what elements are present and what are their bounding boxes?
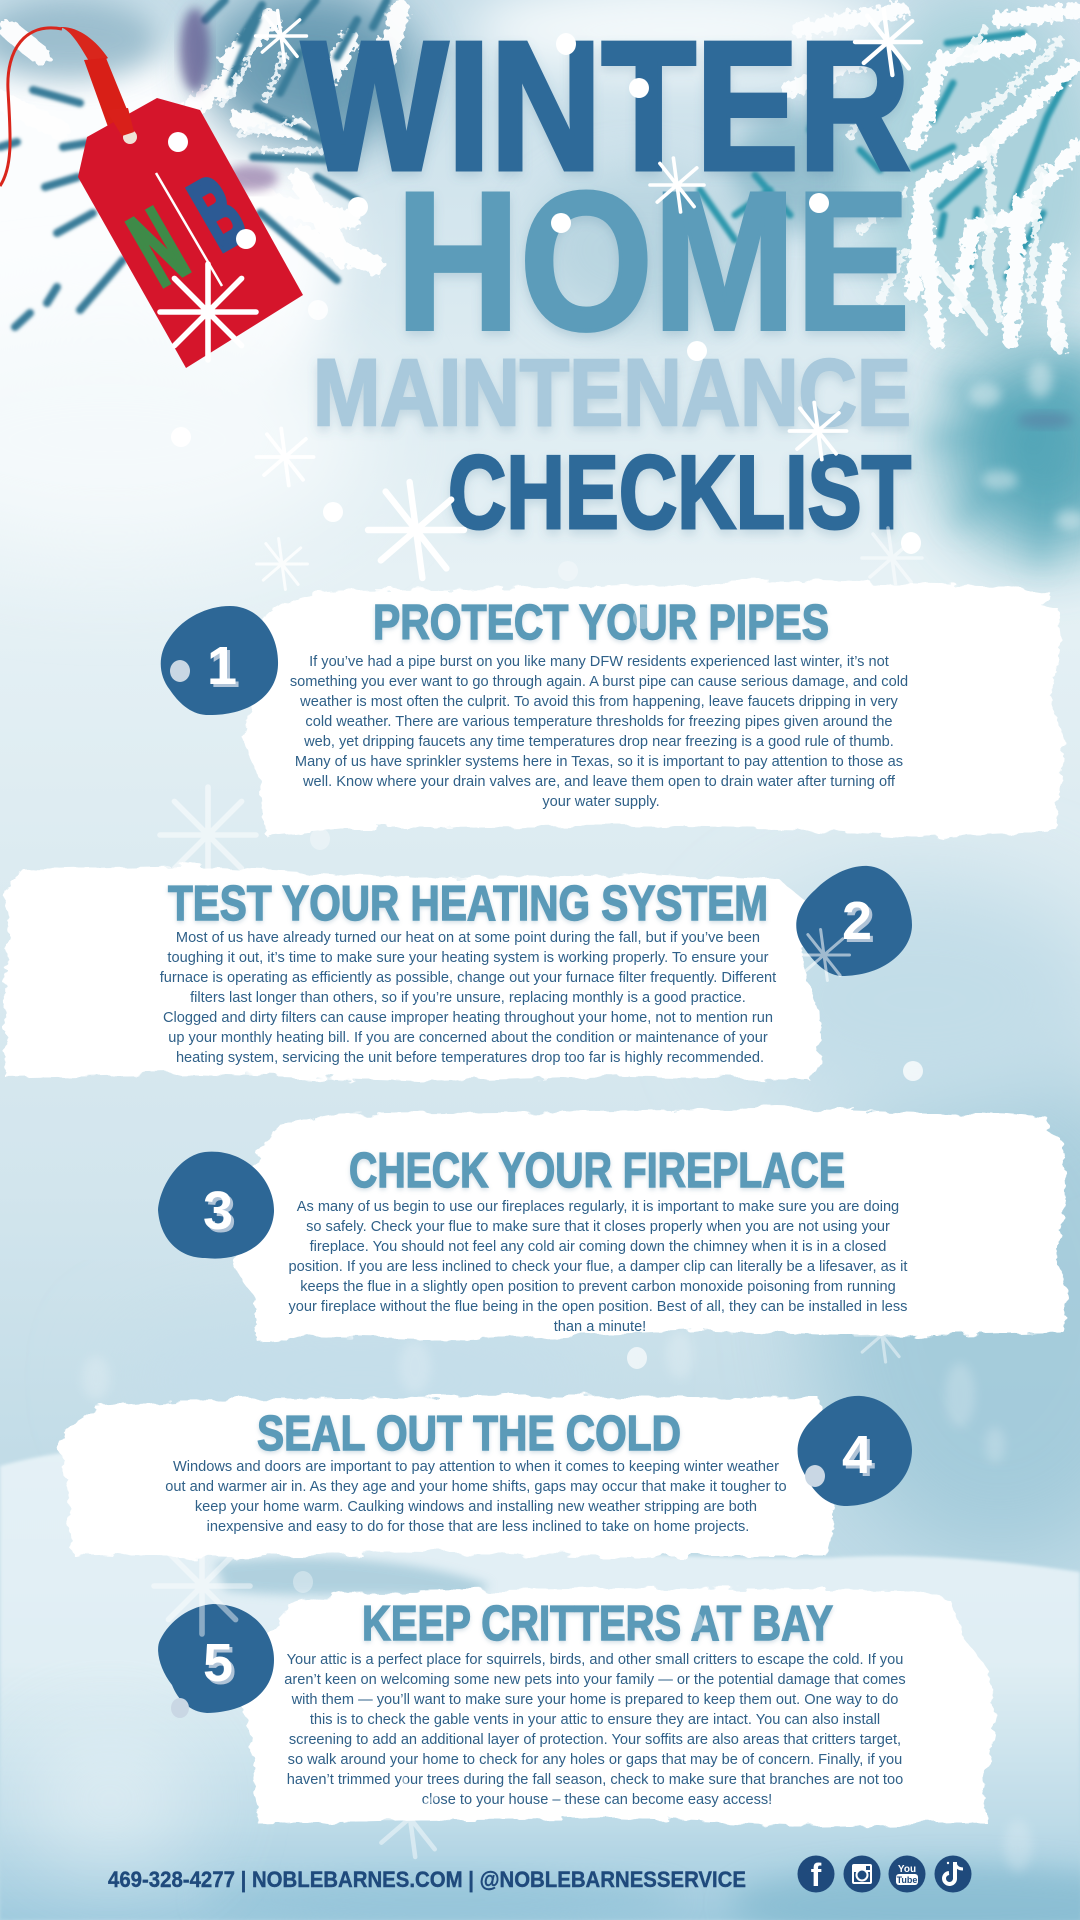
number badge 3: 3 xyxy=(203,1181,233,1241)
body text: than a minute! xyxy=(554,1319,646,1335)
body text: If you’ve had a pipe burst on you like many DFW residents experienced last winter, it’s not xyxy=(309,654,889,670)
heading: SEAL OUT THE COLD xyxy=(257,1407,681,1461)
body text: Most of us have already turned our heat on at some point during the fall, but if you’ve been xyxy=(176,930,760,946)
icon: youtube: You xyxy=(898,1864,916,1875)
body text: your water supply. xyxy=(542,794,660,810)
heading: PROTECT YOUR PIPES xyxy=(373,596,829,650)
body text: weather is most often the culprit. To avoid this from happening, leave faucets dripping in very xyxy=(299,694,898,710)
panel 4: seal out the cold xyxy=(58,1396,836,1558)
snow ground xyxy=(0,1451,1080,1920)
icon: facebook xyxy=(798,1856,834,1893)
number badge 3 xyxy=(158,1152,274,1259)
heading: CHECK YOUR FIREPLACE xyxy=(349,1144,845,1198)
purple shadows xyxy=(180,8,210,92)
icon: ribbon xyxy=(0,28,62,186)
body text: Your attic is a perfect place for squirrels, birds, and other small critters to escape the cold. If you xyxy=(287,1652,903,1668)
body text: this is to check the gable vents in your attic to ensure they are intact. You can also install xyxy=(310,1712,880,1728)
body text: your fireplace without the flue being in the open position. Best of all, they can be installed in less xyxy=(288,1299,907,1315)
body text: aren’t keen on welcoming some new pets into your family — or the potential damage that comes xyxy=(284,1672,906,1688)
body text: cold weather. There are various temperature thresholds for freezing pipes given around the xyxy=(305,714,893,730)
title xyxy=(302,3,911,551)
panel 2: test your heating system xyxy=(4,866,820,1082)
social icons xyxy=(798,1856,972,1893)
body text: keeps the flue in a slightly open position to prevent carbon monoxide poisoning from running xyxy=(300,1279,896,1295)
heading: KEEP CRITTERS AT BAY xyxy=(362,1597,833,1651)
body text: with them — you’ll want to make sure your home is prepared to keep them out. One way to do xyxy=(291,1692,898,1708)
red gift tag with NB logo xyxy=(0,27,303,368)
body text: filters last longer than others, so if you’re unsure, replacing monthly is a good practice. xyxy=(190,990,746,1006)
body text: up your monthly heating bill. If you are concerned about the condition or maintenance of your xyxy=(168,1030,768,1046)
left frost masses xyxy=(0,10,400,265)
icon: facebook: f xyxy=(811,1857,822,1893)
body text: close to your house – these can become easy access! xyxy=(422,1792,772,1808)
panel 5: keep critters at bay xyxy=(240,1588,996,1826)
number badge 4 xyxy=(798,1396,912,1506)
body text: haven’t trimmed your trees during the fall season, check to make sure that branches are not too xyxy=(287,1772,903,1788)
title line: MAINTENANCE: MAINTENANCE xyxy=(313,340,911,446)
body text: furnace is operating as efficiently as possible, change out your furnace filter frequently. Different xyxy=(160,970,776,986)
heading: TEST YOUR HEATING SYSTEM xyxy=(168,877,768,931)
number badge 1 xyxy=(161,606,278,715)
body text: Many of us have sprinkler systems here in Texas, so it is important to pay attention to those as xyxy=(295,754,903,770)
body text: keep your home warm. Caulking windows and installing new weather stripping are both xyxy=(195,1499,757,1515)
bokeh xyxy=(82,1146,1034,1872)
footer contact line: 469-328-4277 | NOBLEBARNES.COM | @NOBLEBARNESSERVICE xyxy=(108,1867,746,1892)
panel 3: check your fireplace xyxy=(232,1108,1068,1340)
number badge 2: 2 xyxy=(842,891,872,951)
left dark needles xyxy=(0,0,387,327)
number badge 4: 4 xyxy=(842,1425,872,1485)
icon: instagram xyxy=(844,1856,880,1892)
body text: heating system, servicing the unit before temperatures drop too far is highly recommended. xyxy=(176,1050,764,1066)
body text: well. Know where your drain valves are, and leave them open to drain water after turning off xyxy=(302,774,896,790)
body text: screening to add an additional layer of protection. Your soffits are also areas that critters target, xyxy=(289,1732,901,1748)
body text: out and warmer air in. As they age and your home shifts, gaps may occur that make it tougher to xyxy=(165,1479,787,1495)
soft tones xyxy=(0,40,340,460)
body text: inexpensive and easy to do for those that are less inclined to take on home projects. xyxy=(207,1519,749,1535)
icon: youtube: Tube xyxy=(897,1875,917,1885)
body text: web, yet dripping faucets any time temperatures drop near freezing is a good rule of thumb. xyxy=(303,734,894,750)
number badge 1: 1 xyxy=(207,636,237,696)
panel 1: protect your pipes xyxy=(240,580,1064,838)
right frosted branches xyxy=(700,33,1073,277)
title line: CHECKLIST: CHECKLIST xyxy=(448,435,911,551)
body text: Clogged and dirty filters can cause improper heating throughout your home, not to mention run xyxy=(163,1010,773,1026)
title line: WINTER: WINTER xyxy=(302,3,910,208)
body text: position. If you are less inclined to check your flue, a damper clip can literally be a lifesaver, as it xyxy=(288,1259,907,1275)
body text: toughing it out, it’s time to make sure your heating system is working properly. To ensure your xyxy=(167,950,769,966)
icon: youtube xyxy=(888,1856,926,1892)
logo letter N: N xyxy=(113,188,204,307)
body text: so walk around your home to check for any holes or gaps that may be of concern. Finally, if you xyxy=(288,1752,902,1768)
body text: fireplace. You should not feel any cold air coming down the chimney when it is in a closed xyxy=(310,1239,886,1255)
number badge 2 xyxy=(796,866,912,976)
number badge 5 xyxy=(158,1604,274,1713)
title line: HOME: HOME xyxy=(396,151,910,371)
number badge 5: 5 xyxy=(203,1633,233,1693)
icon: tiktok xyxy=(934,1856,972,1892)
body text: something you ever want to go through again. A burst pipe can cause serious damage, and cold xyxy=(290,674,908,690)
falling snow dots and snowflakes xyxy=(154,9,923,1857)
body text: As many of us begin to use our fireplaces regularly, it is important to make sure you are doing xyxy=(297,1199,899,1215)
logo letter B: B xyxy=(174,154,262,271)
body text: so safely. Check your flue to make sure that it closes properly when you are not using your xyxy=(306,1219,890,1235)
body text: Windows and doors are important to pay attention to when it comes to keeping winter weather xyxy=(173,1459,779,1475)
